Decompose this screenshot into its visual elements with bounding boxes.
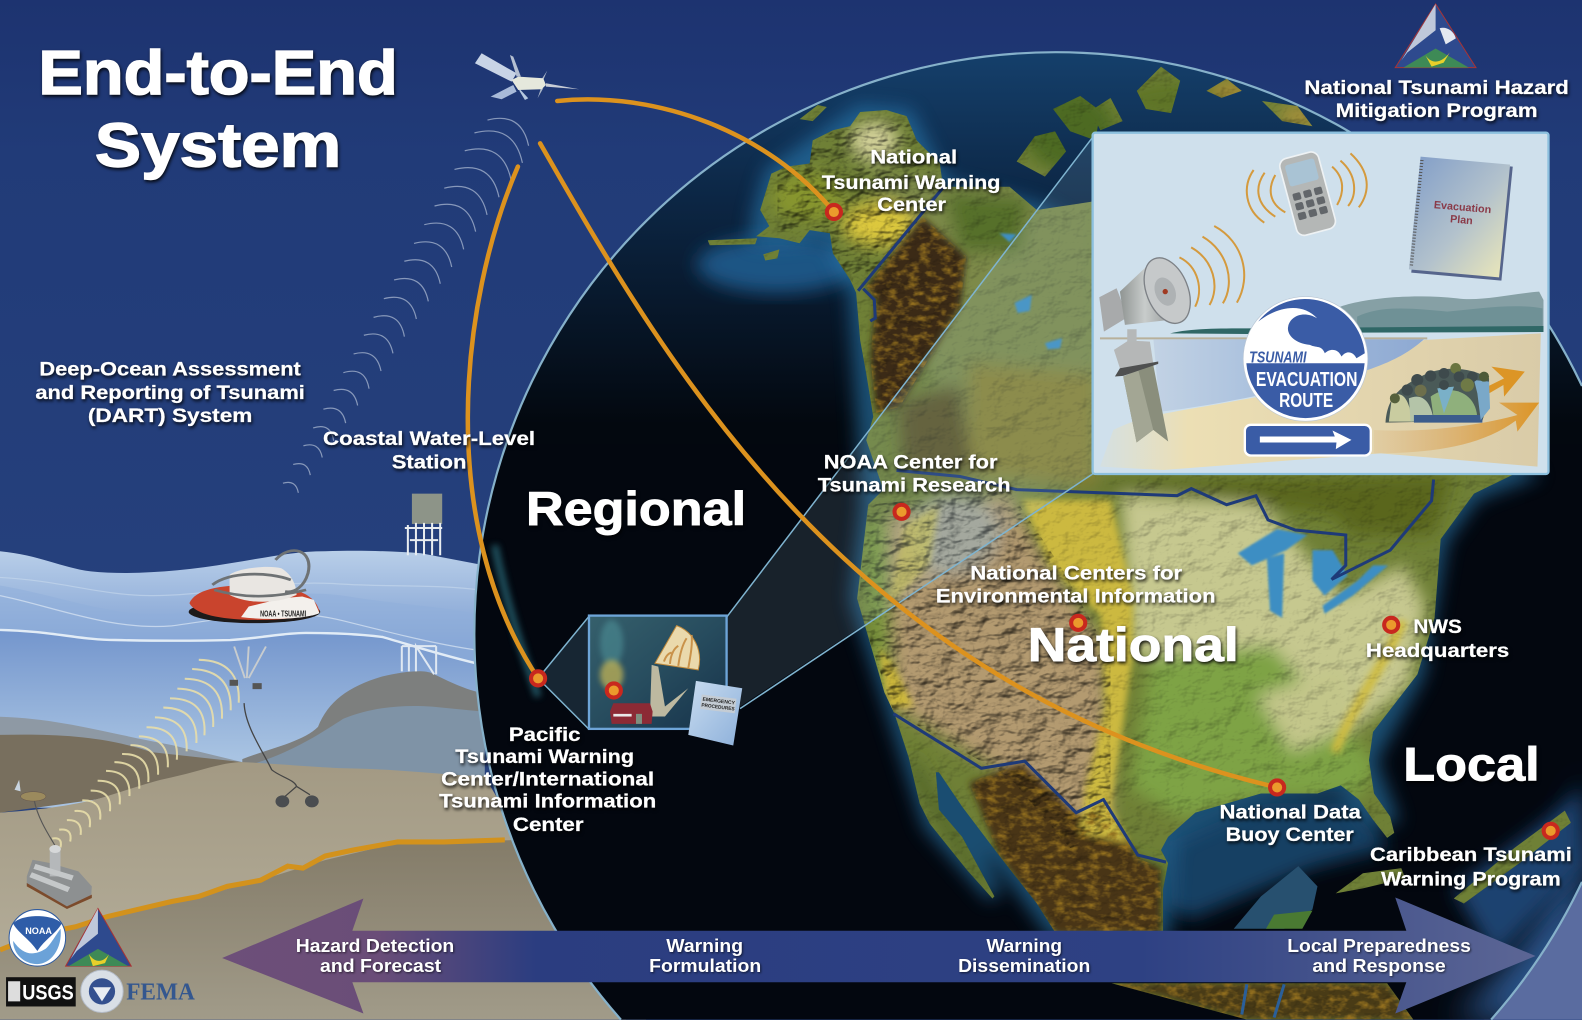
label: NWS: Headquarters [1366, 641, 1509, 662]
satellite [475, 53, 579, 100]
logo: DHS seal [81, 970, 123, 1013]
label: NDBC: Buoy Center [1226, 825, 1354, 846]
label: coastal station: Coastal Water-Level [323, 429, 535, 450]
panel evacuation route sign [1243, 297, 1368, 421]
label: NCEI [936, 563, 1216, 608]
label: Local: Local [1403, 738, 1540, 791]
panel sound waves [1179, 153, 1367, 307]
panel direction sign [1245, 425, 1371, 455]
label: NTWC: National [870, 148, 957, 169]
arrow labels: Dissemination [958, 956, 1090, 976]
label: NOAA research center: NOAA Center for [824, 452, 998, 473]
label: NCEI: National Centers for [970, 563, 1183, 584]
label: NDBC [1220, 803, 1361, 846]
label: Caribbean [1370, 845, 1572, 890]
title [38, 38, 398, 181]
label: coastal station: Station [392, 452, 466, 473]
panel siren [1099, 251, 1199, 443]
label: program name: National Tsunami Hazard [1304, 78, 1569, 99]
globe [464, 40, 1582, 1020]
title: System [95, 111, 341, 181]
mooring, anchors and seabed sensor [15, 646, 319, 909]
arrow labels: Warning [986, 936, 1062, 956]
panel evacuation plan notebook [1409, 157, 1513, 281]
panel evacuation route sign: EVACUATION [1256, 368, 1357, 391]
panel evacuation route sign: ROUTE [1279, 389, 1333, 412]
inset: Pacific warning center [589, 616, 742, 746]
panel evacuation route sign: TSUNAMI [1249, 350, 1307, 367]
signal arcs: buoy to satellite [283, 109, 535, 493]
logo: NOAA [9, 910, 66, 966]
title: End-to-End [38, 38, 398, 108]
panel evacuation plan notebook: Evacuation [1433, 199, 1492, 216]
panel people group [1386, 363, 1490, 423]
signal arcs: seabed sensor to buoy [52, 649, 250, 847]
markers [531, 205, 1558, 838]
label: National: National [1028, 619, 1239, 672]
inset: Pacific warning center: PROCEDURES [701, 703, 735, 713]
label: Regional: Regional [526, 483, 746, 536]
label: DART: Deep-Ocean Assessment [39, 360, 302, 381]
panel mobile phone [1278, 150, 1337, 237]
label: NDBC: National Data [1220, 803, 1361, 824]
label: NOAA research center [818, 452, 1011, 497]
lower-right background wash [1484, 868, 1582, 1020]
label: NTWC [822, 148, 1000, 216]
inset: Pacific warning center: EMERGENCY [702, 697, 736, 707]
logo: NOAA: NOAA [25, 926, 52, 936]
light beams linking insets [538, 136, 1093, 729]
arrow labels: and Response [1312, 956, 1446, 976]
buoy: NOAA • TSUNAMI [260, 609, 306, 618]
label: PTWC: Tsunami Information [439, 792, 656, 813]
label: NTWC: Center [877, 195, 947, 216]
logo: USGS: USGS [22, 981, 74, 1004]
arrow labels [296, 936, 1471, 976]
orange data links [468, 99, 1277, 787]
label: PTWC: Pacific [509, 725, 581, 746]
arrow labels: and Forecast [320, 956, 441, 976]
arrow labels: Formulation [649, 956, 761, 976]
label: program name [1304, 78, 1569, 122]
label: NTWC: Tsunami Warning [822, 173, 1000, 194]
arrow labels: Hazard Detection [296, 936, 454, 956]
panel evacuation plan notebook: Plan [1450, 213, 1473, 227]
label: Caribbean: Caribbean Tsunami [1370, 845, 1572, 866]
seabed fault line [0, 840, 505, 950]
label: NCEI: Environmental Information [936, 587, 1216, 608]
ocean and seabed scene [0, 551, 646, 1020]
label: DART [35, 360, 305, 427]
timeline arrow [222, 897, 1536, 1014]
label: Caribbean: Warning Program [1381, 869, 1561, 890]
label: PTWC [439, 725, 656, 836]
coastal water-level station tower [402, 494, 442, 674]
label: coastal station [323, 429, 535, 473]
logo: program triangle, bottom [66, 909, 131, 966]
globe limb outline [474, 52, 1582, 1020]
logo: program triangle, top [1395, 4, 1476, 68]
logo: USGS [6, 977, 76, 1006]
label: NWS: NWS [1413, 617, 1462, 638]
arrow labels: Warning [666, 936, 743, 956]
label: program name: Mitigation Program [1336, 101, 1538, 122]
label: PTWC: Tsunami Warning [455, 747, 634, 768]
arrow labels: Local Preparedness [1287, 936, 1471, 956]
label: DART: and Reporting of Tsunami [35, 383, 305, 404]
panel: local preparedness [1093, 133, 1548, 474]
label: PTWC: Center/International [441, 769, 654, 790]
label: NWS [1366, 617, 1509, 662]
label: PTWC: Center [513, 815, 584, 836]
label: NOAA research center: Tsunami Research [818, 476, 1011, 497]
buoy [189, 551, 320, 623]
label: DART: (DART) System [88, 406, 252, 427]
logo: FEMA: FEMA [126, 978, 195, 1005]
